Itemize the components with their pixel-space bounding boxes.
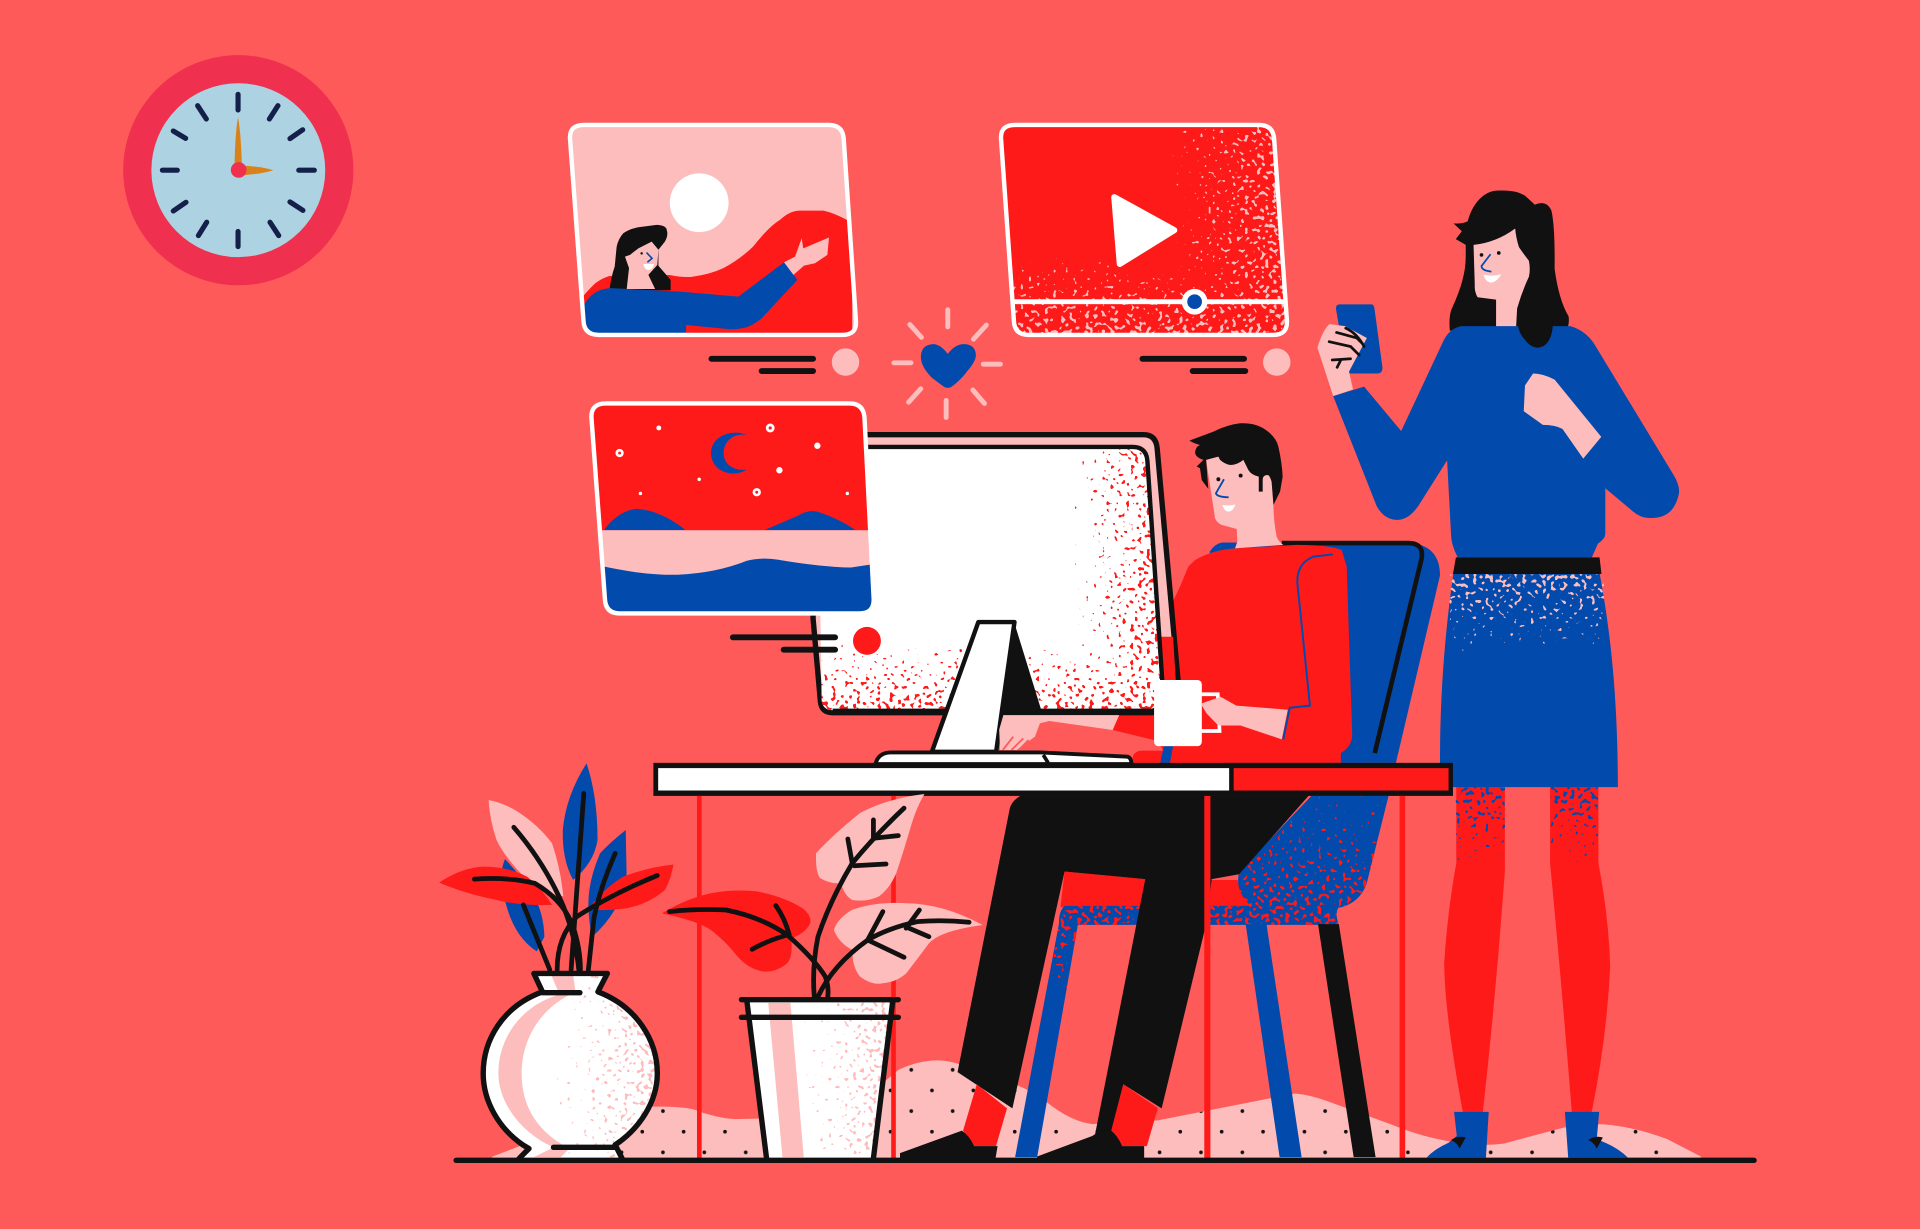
legs [1444, 784, 1610, 1114]
screen [818, 448, 1164, 710]
monitor stand [932, 622, 1042, 752]
boots [1427, 1112, 1628, 1158]
dotted ground hills [492, 1060, 1701, 1160]
seat [1060, 871, 1251, 907]
seated man [900, 423, 1352, 1158]
shoe: right [1037, 1129, 1144, 1158]
sweater [584, 262, 798, 333]
hair [1189, 423, 1283, 505]
facial features [1480, 251, 1501, 283]
water [604, 558, 872, 612]
progress bar [998, 299, 1292, 304]
skirt [1440, 573, 1618, 787]
stems [474, 793, 657, 970]
leaf: red right [588, 864, 673, 910]
mountains [604, 509, 856, 530]
chair back outline [1282, 543, 1422, 753]
sleeve seam [1283, 554, 1333, 739]
sock: right [1111, 1084, 1158, 1146]
moon [711, 433, 747, 473]
pot [747, 1002, 893, 1158]
vase plant on left [439, 763, 673, 1160]
pot speckle [802, 1002, 894, 1158]
ground line [456, 1158, 1754, 1163]
leaf: blue right [588, 830, 627, 937]
desk legs [697, 796, 1405, 1158]
icon: heart with rays [894, 310, 1000, 418]
shoe: left [900, 1131, 998, 1158]
leaf: blue tall [563, 763, 598, 880]
sand band [602, 530, 870, 575]
potted plant on right [662, 794, 983, 1158]
hair [1449, 190, 1569, 331]
facial features [1216, 474, 1243, 512]
vase speckle [557, 973, 661, 1160]
seat cushion and rail [1059, 796, 1389, 925]
sock: left [963, 1084, 1007, 1146]
play icon [1114, 197, 1174, 264]
man's right hand [1201, 697, 1288, 739]
red wave [576, 211, 852, 343]
keyboard [876, 752, 1131, 764]
pointing hand [784, 238, 829, 275]
skirt speckle [1450, 574, 1604, 650]
leaf: blue left [501, 859, 544, 951]
monitor body [813, 435, 1178, 713]
caption lines: card two [1142, 348, 1290, 376]
belt [1453, 557, 1601, 574]
phone [1336, 304, 1382, 373]
sun [670, 173, 729, 232]
chair leg: left [1015, 922, 1078, 1157]
chair leg: middle [1246, 924, 1302, 1157]
stems and veins [669, 808, 969, 997]
leaf: red [662, 891, 811, 972]
leg speckle [1456, 787, 1598, 863]
leaf: pink right [834, 903, 983, 984]
photo card: woman pointing [563, 120, 863, 343]
progress knob [1182, 289, 1207, 315]
stars [615, 424, 849, 496]
screen border [818, 447, 1163, 711]
pot outline [747, 1002, 893, 1158]
neck and face [1474, 228, 1530, 331]
caption lines: card three [733, 627, 881, 655]
coffee mug [1154, 680, 1220, 746]
leaf: pink top [816, 794, 924, 901]
screen speckle [820, 448, 1166, 713]
shirt [1112, 545, 1352, 763]
leaf: pink [489, 800, 563, 896]
desk [653, 763, 1453, 796]
red speckle on seat [1053, 796, 1396, 926]
neck and face [1206, 456, 1283, 548]
blue chair strip near mug [1160, 746, 1173, 763]
office chair [1015, 542, 1440, 1157]
speckle on left leg [1051, 922, 1078, 994]
man's left arm and hand on keyboard [999, 715, 1119, 750]
desktop monitor [813, 435, 1178, 713]
video card: play button [992, 120, 1296, 340]
video speckle [1169, 125, 1289, 339]
chair leg: rear [1318, 924, 1376, 1157]
boot straps [1451, 1137, 1603, 1149]
leaf: red left [439, 867, 552, 905]
illustration: people working at a desk [123, 55, 1757, 1163]
vase outline [483, 973, 657, 1158]
chair back [1210, 542, 1440, 763]
facial features [640, 252, 654, 270]
vase body [483, 972, 657, 1158]
face [625, 242, 658, 289]
pot stripe [768, 1003, 804, 1157]
landscape card: night scene [585, 398, 879, 618]
woman standing with phone [1317, 190, 1679, 1158]
vase shading [498, 975, 576, 1157]
trousers [958, 796, 1309, 1136]
caption lines: card one [711, 348, 859, 376]
ponytail over sweater [1517, 321, 1553, 348]
hand holding phone [1317, 324, 1367, 396]
wall clock [123, 55, 353, 285]
fist and forearm [1524, 373, 1601, 459]
monitor side red [1160, 637, 1176, 703]
hair [609, 225, 671, 290]
sweater [1333, 326, 1679, 557]
